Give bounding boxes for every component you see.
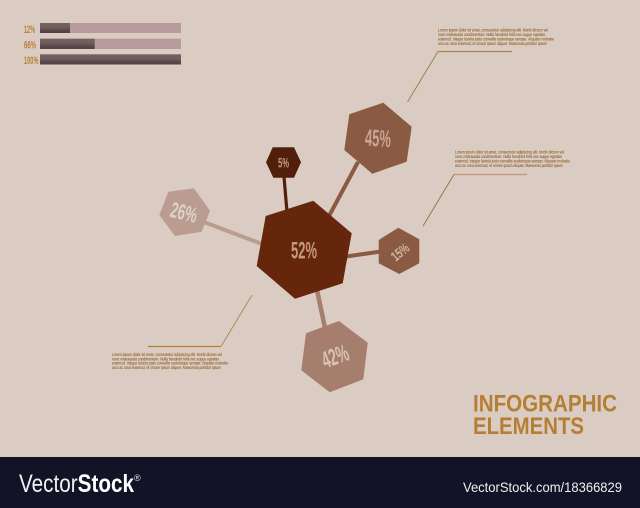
title: ELEMENTS: [473, 413, 584, 440]
callout: middle right: arcu ac urna euismod, et ornare ipsum aliquet. Maecenas porttitor ipsum: [455, 163, 563, 168]
bar: 12%: 12%: [24, 24, 35, 36]
bar: 100%: 100%: [24, 55, 39, 67]
registered mark: ®: [134, 473, 141, 483]
hexagon: 45%: [344, 103, 412, 174]
hexagon diagram: [159, 103, 419, 392]
callout: middle right: [423, 150, 571, 226]
hexagon: 52%: 52%: [291, 238, 317, 264]
bar: 66%: 66%: [24, 40, 36, 52]
hexagon: 15%: [379, 228, 419, 274]
hexagon: 5%: 5%: [278, 154, 289, 170]
callout: bottom left: arcu ac urna euismod, et ornare ipsum aliquet. Maecenas porttitor ipsum: [112, 365, 221, 370]
callout: middle right: nunc malesuada condimentum. Nulla hendrerit felis nec augue egestas: [455, 154, 562, 159]
hexagon: 42%: 42%: [318, 340, 353, 374]
connector: 45%: [329, 162, 358, 216]
callout: bottom left: Lorem ipsum dolor sit amet, consectetur adipiscing elit. Morbi dictum vel: [112, 352, 222, 357]
title: [473, 391, 617, 440]
hexagon: 26%: [159, 188, 210, 236]
connector: 42%: [317, 290, 325, 328]
callout: middle right: euismod. Integer lacinia justo convallis scelerisque semper. Aliquam molestie: [455, 158, 571, 164]
hexagon: 15%: 15%: [388, 240, 413, 264]
connector: 15%: [346, 252, 381, 256]
hexagon: 5%: [266, 147, 301, 178]
callout: middle right: Lorem ipsum dolor sit amet, consectetur adipiscing elit. Morbi dictum vel: [455, 150, 564, 154]
callout: bottom left: euismod. Integer lacinia justo convallis scelerisque semper. Aliquam molestie: [112, 361, 229, 366]
hexagon: 45%: 45%: [364, 125, 392, 153]
footer bar: [0, 457, 640, 508]
callout: bottom left: [112, 295, 252, 370]
connector: 5%: [284, 177, 287, 212]
bar: 66%: [24, 39, 181, 52]
hexagon: 26%: 26%: [168, 197, 200, 228]
logo: VectorStock: VectorStock: [19, 470, 134, 498]
callout: bottom left: nunc malesuada condimentum. Nulla hendrerit felis nec augue egestas: [112, 356, 219, 361]
bar: 12%: [24, 23, 181, 36]
hexagon: 42%: [301, 321, 368, 392]
callout: top right: [408, 28, 555, 102]
connector: 26%: [204, 222, 262, 244]
callout: top right: arcu ac urna euismod, et ornare ipsum aliquet. Maecenas porttitor ipsum: [438, 41, 547, 46]
progress bars: [24, 23, 181, 67]
image id: VectorStock.com/18366829: [463, 479, 622, 495]
callout: top right: Lorem ipsum dolor sit amet, consectetur adipiscing elit. Morbi dictum vel: [438, 28, 548, 32]
callout: top right: nunc malesuada condimentum. Nulla hendrerit felis nec augue egestas: [438, 32, 545, 37]
title: INFOGRAPHIC: [473, 391, 617, 418]
hexagon: 52%: [257, 201, 352, 299]
callout: top right: euismod. Integer lacinia justo convallis scelerisque semper. Aliquam molestie: [438, 36, 555, 41]
bar: 100%: [24, 54, 181, 67]
